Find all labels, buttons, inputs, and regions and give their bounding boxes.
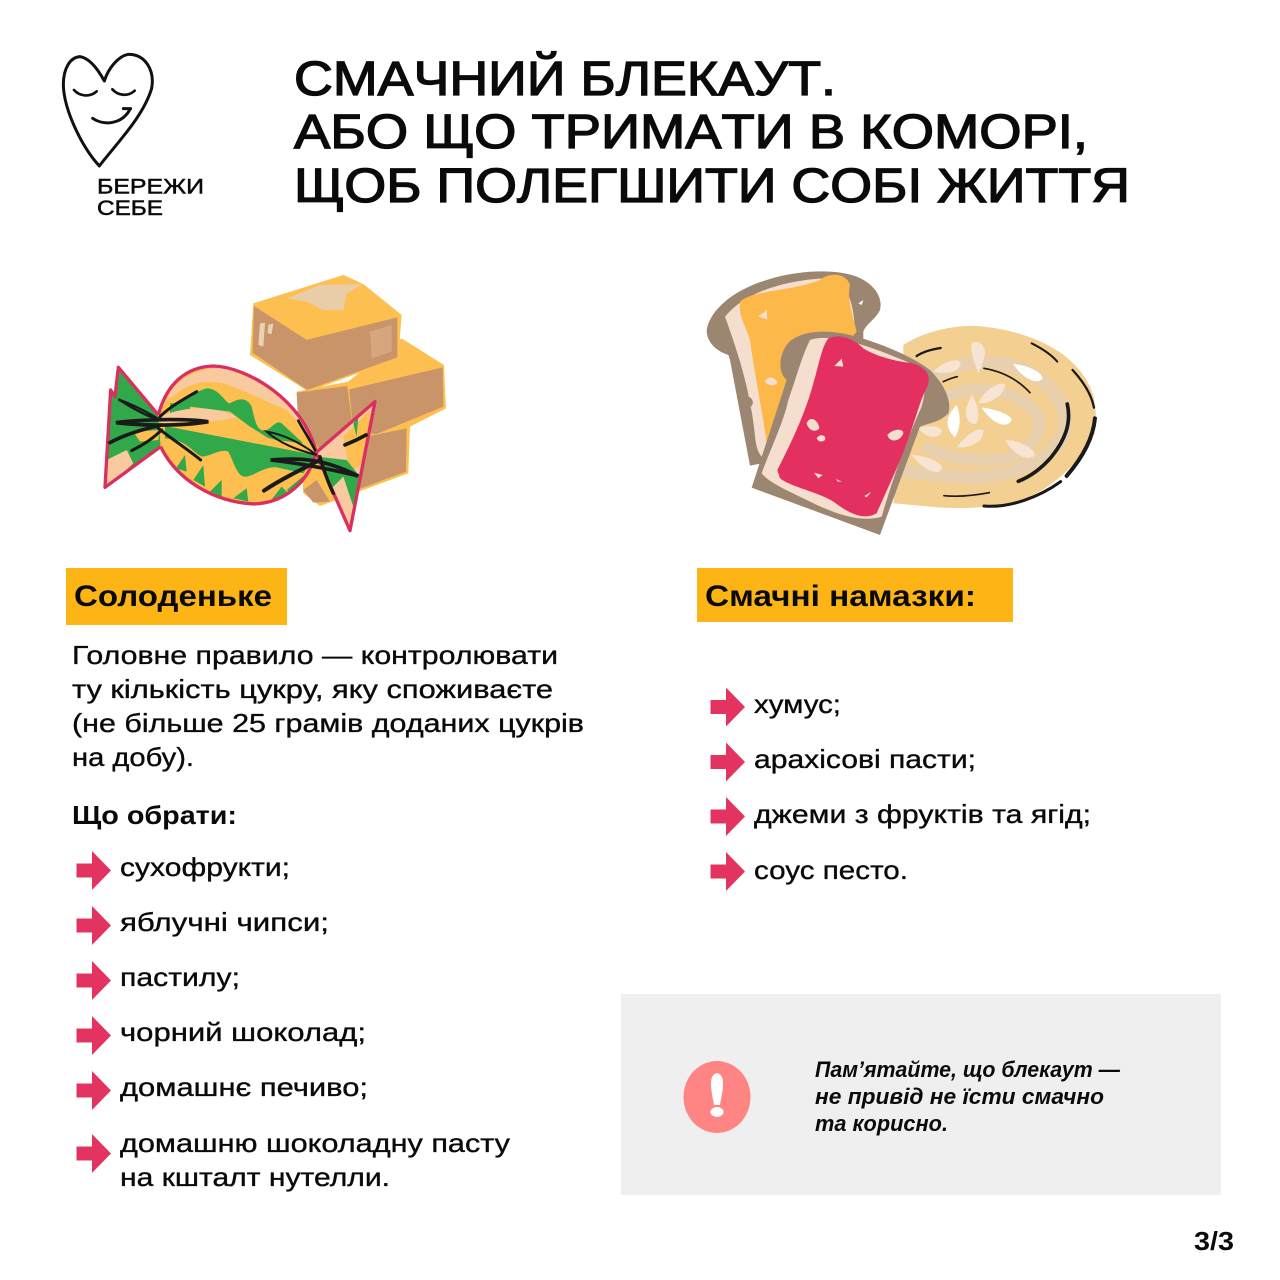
label: spreads: Смачні намазки: [705,580,976,613]
list item: jams [710,797,1091,836]
list item: apple chips: яблучні чипси; [120,907,329,937]
list item: peanut butter [710,742,976,782]
callout text: Пам’ятайте, що блекаут — [815,1057,1121,1082]
title: СМАЧНИЙ БЛЕКАУТ. [294,51,836,106]
text block: main rule: Головне правило — контролювати [72,640,558,670]
list item: hummus [710,688,841,726]
list item: pesto [710,852,908,891]
title [294,51,1130,213]
candy black twist strokes [110,392,366,493]
label: spreads [697,568,1013,622]
title: ЩОБ ПОЛЕГШИТИ СОБІ ЖИТТЯ [294,160,1130,213]
list item: dried fruit: сухофрукти; [120,852,290,882]
title: АБО ЩО ТРИМАТИ В КОМОРІ, [294,106,1088,159]
icon: heart face [63,54,152,166]
icon: exclamation mark [684,1061,750,1133]
list item: homemade cookies: домашнє печиво; [120,1072,368,1102]
list item: peanut butter: арахісові пасти; [754,744,976,774]
list item: apple chips [76,906,329,945]
caramel cubes [250,275,446,506]
candy body [158,368,314,502]
label: sweets: Солоденьке [74,580,272,613]
list item: pastila [76,961,240,1000]
list item: homemade chocolate paste [76,1128,510,1192]
illustration: toast with spreads and pastry [707,271,1096,535]
list item: homemade cookies [76,1071,368,1110]
list item: homemade chocolate paste: на кшталт нутелли. [120,1162,390,1192]
list item: dark chocolate: чорний шоколад; [120,1017,366,1047]
front toast with jam [752,332,949,535]
logo text second line: СЕБЕ [97,197,163,220]
list item: hummus: хумус; [754,689,841,719]
list item: pesto: соус песто. [754,855,908,885]
list item: jams: джеми з фруктів та ягід; [754,799,1091,829]
subheading: what to choose: Що обрати: [72,800,237,830]
callout text: не привід не їсти смачно [815,1084,1104,1109]
text block: main rule: на добу). [72,742,194,772]
illustration: candy and caramel cubes [103,275,446,533]
text block: main rule: ту кількість цукру, яку споживаєте [72,674,553,704]
text block: main rule [72,640,584,772]
callout text: та корисно. [815,1111,948,1136]
list item: homemade chocolate paste: домашню шоколадну пасту [120,1128,510,1158]
callout: reminder [621,994,1221,1195]
list item: dried fruit [76,851,290,890]
page number: 3/3 [1194,1226,1234,1256]
list: sweets [76,851,510,1192]
pastry [893,326,1096,508]
label: sweets [66,568,287,625]
candy right wrapper [313,400,377,533]
logo text: БЕРЕЖИ [97,176,204,198]
list item: pastila: пастилу; [120,962,240,992]
list: spreads [710,688,1091,891]
list item: dark chocolate [76,1016,366,1055]
candy left wrapper [103,363,163,490]
text block: main rule: (не більше 25 грамів доданих цукрів [72,708,584,738]
logo: smiling heart with brand name [63,54,204,220]
back toast with orange spread [707,271,881,466]
callout text [815,1057,1121,1136]
